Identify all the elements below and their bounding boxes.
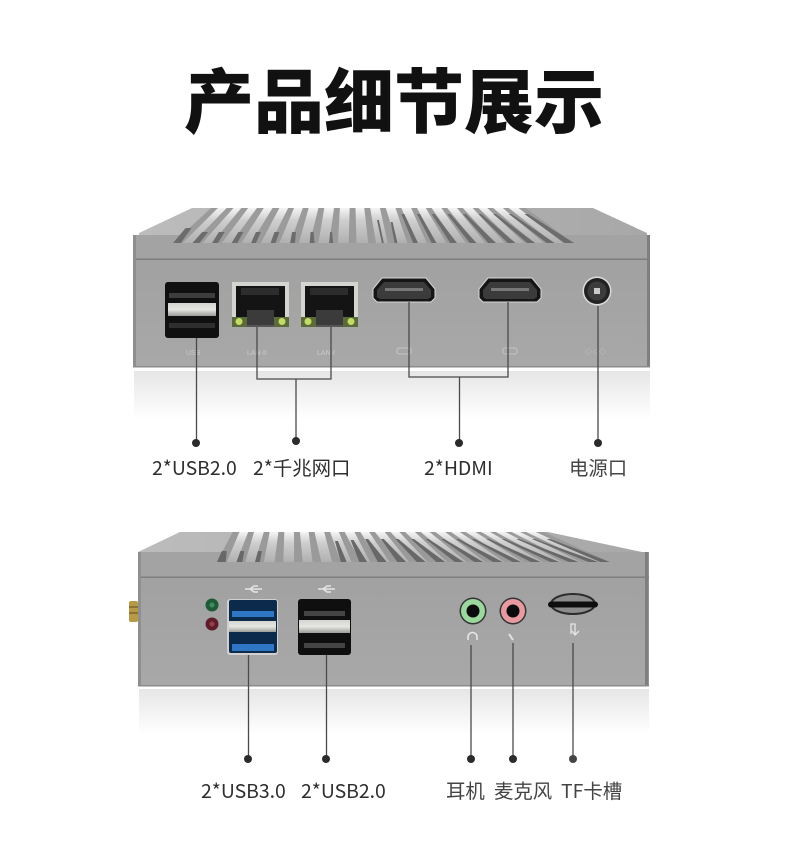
leader: USB 2.0 rear [192,338,200,447]
port: double USB 2.0 [165,282,219,338]
label: microphone: 麦克风 [494,775,552,804]
port: DC power jack [582,276,612,306]
leader: TF slot [569,643,577,763]
label: 2*USB2.0 front: 2*USB2.0 [301,775,386,804]
panel: rear view device [133,208,650,419]
USB icons [245,586,335,592]
antenna connector [129,601,138,622]
label: power port: 电源口 [569,452,627,481]
device front panel [133,235,650,367]
label: 2*USB2.0 rear: 2*USB2.0 [152,452,237,481]
leader: headphone [467,645,475,763]
port: LAN 2 [301,282,358,327]
leader: HDMI bracket [409,302,508,447]
faint silk-screen port marks: LAN-I [317,350,335,357]
port: double USB 3.0 [227,599,278,655]
faint silk-screen port marks [186,348,606,357]
icon: microphone [509,634,513,640]
status LEDs [206,598,218,630]
port: double USB 2.0 [298,599,351,655]
label: 2*USB3.0: 2*USB3.0 [201,775,286,804]
port: HDMI 1 [373,278,435,302]
port: TF card slot [548,594,598,614]
label: TF card slot: TF卡槽 [561,775,622,804]
panel: front view device [129,532,649,734]
device reflection [134,371,650,419]
leader: DC power [594,306,602,447]
faint silk-screen port marks: USB [186,350,201,357]
device cooling fins and grooves [173,208,574,243]
port: microphone jack [500,598,526,624]
device top face [139,208,647,240]
leader: USB 3.0 [244,655,252,763]
title: 产品细节展示 [184,47,604,148]
device front panel [138,552,649,686]
device top face [138,532,642,558]
label: headphone: 耳机 [446,775,485,804]
leader: USB 2.0 front [322,655,330,763]
label: 2*HDMI: 2*HDMI [424,452,493,481]
faint silk-screen port marks: LAN-II [247,350,267,357]
leader: microphone [509,643,517,763]
port: headphone jack [460,598,486,624]
label: 2*gigabit LAN: 2*千兆网口 [253,452,350,481]
port: LAN 1 [232,282,289,327]
device cooling fins and grooves [217,532,610,562]
device reflection [139,689,649,734]
port: HDMI 2 [479,278,541,302]
faint silk-screen port marks: ◇◁◇ [585,348,606,356]
icon: headphone [468,632,477,640]
leader: LAN bracket [257,327,331,445]
icon: card insert [571,624,579,635]
